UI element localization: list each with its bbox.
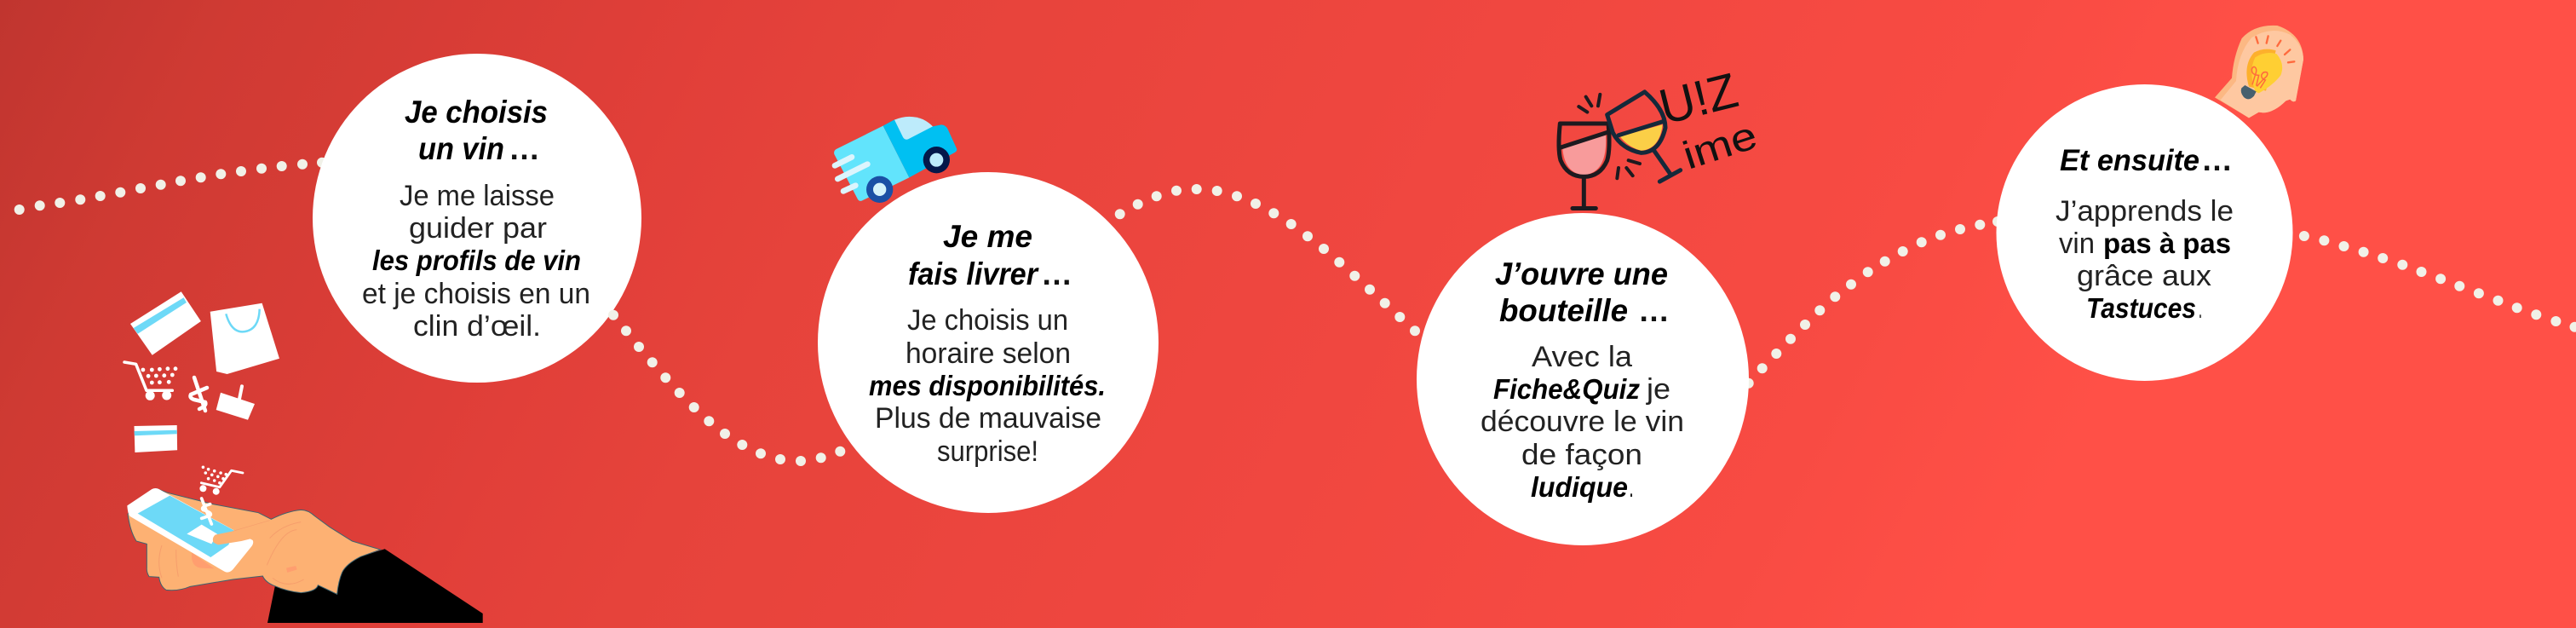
step 2 disc	[818, 172, 1159, 513]
step 3 heading	[1495, 256, 1670, 328]
icon: shopping cart	[124, 362, 177, 400]
step 3 body text: de façon	[1521, 439, 1642, 471]
icon: basket	[216, 386, 255, 420]
clink ticks	[1578, 95, 1640, 178]
step 2 heading: …	[1041, 256, 1072, 291]
step 4 heading: Et ensuite	[2060, 144, 2199, 177]
step 2 heading: Je me	[943, 219, 1032, 254]
quiz logo text: U!Z	[1653, 62, 1743, 135]
step 1 body text: clin d’œil.	[413, 310, 541, 343]
icon: credit card tilted	[130, 291, 201, 355]
step 1 heading: …	[509, 131, 540, 166]
black sleeve	[267, 549, 483, 623]
step 1 body text: Je me laisse	[400, 180, 555, 212]
step 3 heading: …	[1638, 293, 1670, 328]
step 4 body text: Tastuces	[2086, 292, 2196, 324]
step 3 heading: J’ouvre une	[1495, 256, 1668, 291]
step 1 body text: guider par	[409, 212, 547, 245]
step 3 body text: découvre le vin	[1481, 406, 1684, 438]
step 4 disc	[1997, 84, 2293, 381]
step 1 body text	[362, 180, 590, 343]
quiz logo text: ime	[1677, 112, 1762, 178]
white wine glass	[1607, 92, 1681, 181]
icon: dollar sign	[191, 377, 207, 411]
step 2 body text: surprise!	[937, 435, 1038, 468]
step 2 heading: fais livrer	[908, 256, 1039, 291]
step 1 disc	[313, 54, 641, 383]
dotted path: start to step 1	[14, 158, 327, 215]
step 4 body text: grâce aux	[2077, 260, 2211, 292]
rosé glass	[1559, 124, 1609, 208]
dotted path: step 1 to step 2	[608, 310, 845, 466]
step 1 body text: et je choisis en un	[362, 278, 590, 310]
illustration: hand holding phone with shopping icons	[124, 291, 483, 623]
step 4 body text: J’apprends le	[2056, 195, 2234, 228]
icon: small shopping cart	[199, 465, 243, 495]
icon: delivery truck	[834, 117, 957, 203]
icon: clinking wine glasses	[1559, 92, 1681, 208]
step 4 body text: vin	[2059, 228, 2095, 260]
step 2 body text: horaire selon	[906, 337, 1071, 370]
hand and phone	[127, 488, 381, 594]
step 1 heading	[405, 95, 548, 166]
icon: shopping bag	[210, 303, 279, 374]
panel: step 4 circle	[1997, 84, 2293, 381]
dotted path: step 2 to step 3	[1115, 184, 1420, 336]
step 3 body text: Avec la	[1532, 341, 1632, 373]
step 3 body text: je	[1646, 373, 1670, 406]
icon: thinking head with light bulb	[2215, 26, 2303, 118]
step 1 heading: un vin	[418, 131, 504, 166]
step 2 body text: Je choisis un	[907, 304, 1068, 337]
step 2 heading	[908, 219, 1072, 291]
step 4 body text: pas à pas	[2103, 228, 2231, 259]
panel: step 3 circle	[1417, 213, 1749, 545]
step 2 body text: mes disponibilités.	[869, 370, 1106, 401]
step 3 heading: bouteille	[1499, 293, 1628, 328]
step 1 body text: les profils de vin	[372, 245, 581, 276]
panel: step 2 circle	[818, 172, 1159, 513]
panel: step 1 circle	[313, 54, 641, 383]
step 4 body text: .	[2198, 292, 2203, 325]
step 3 disc	[1417, 213, 1749, 545]
step 3 body text: .	[1629, 471, 1634, 504]
icon: credit card flat	[135, 425, 177, 452]
quiz logo text	[1653, 62, 1762, 178]
step 3 body text: Fiche&Quiz	[1493, 373, 1640, 405]
step 3 body text: ludique	[1531, 471, 1628, 503]
step 1 heading: Je choisis	[405, 95, 548, 130]
step 4 heading: …	[2201, 142, 2233, 177]
dotted path: step 4 to edge	[2299, 231, 2576, 332]
step 3 body text	[1481, 341, 1684, 504]
step 2 body text: Plus de mauvaise	[875, 402, 1101, 435]
dotted path: step 3 to step 4	[1744, 216, 2003, 389]
step 4 body text	[2056, 195, 2234, 325]
step 2 body text	[869, 304, 1106, 468]
